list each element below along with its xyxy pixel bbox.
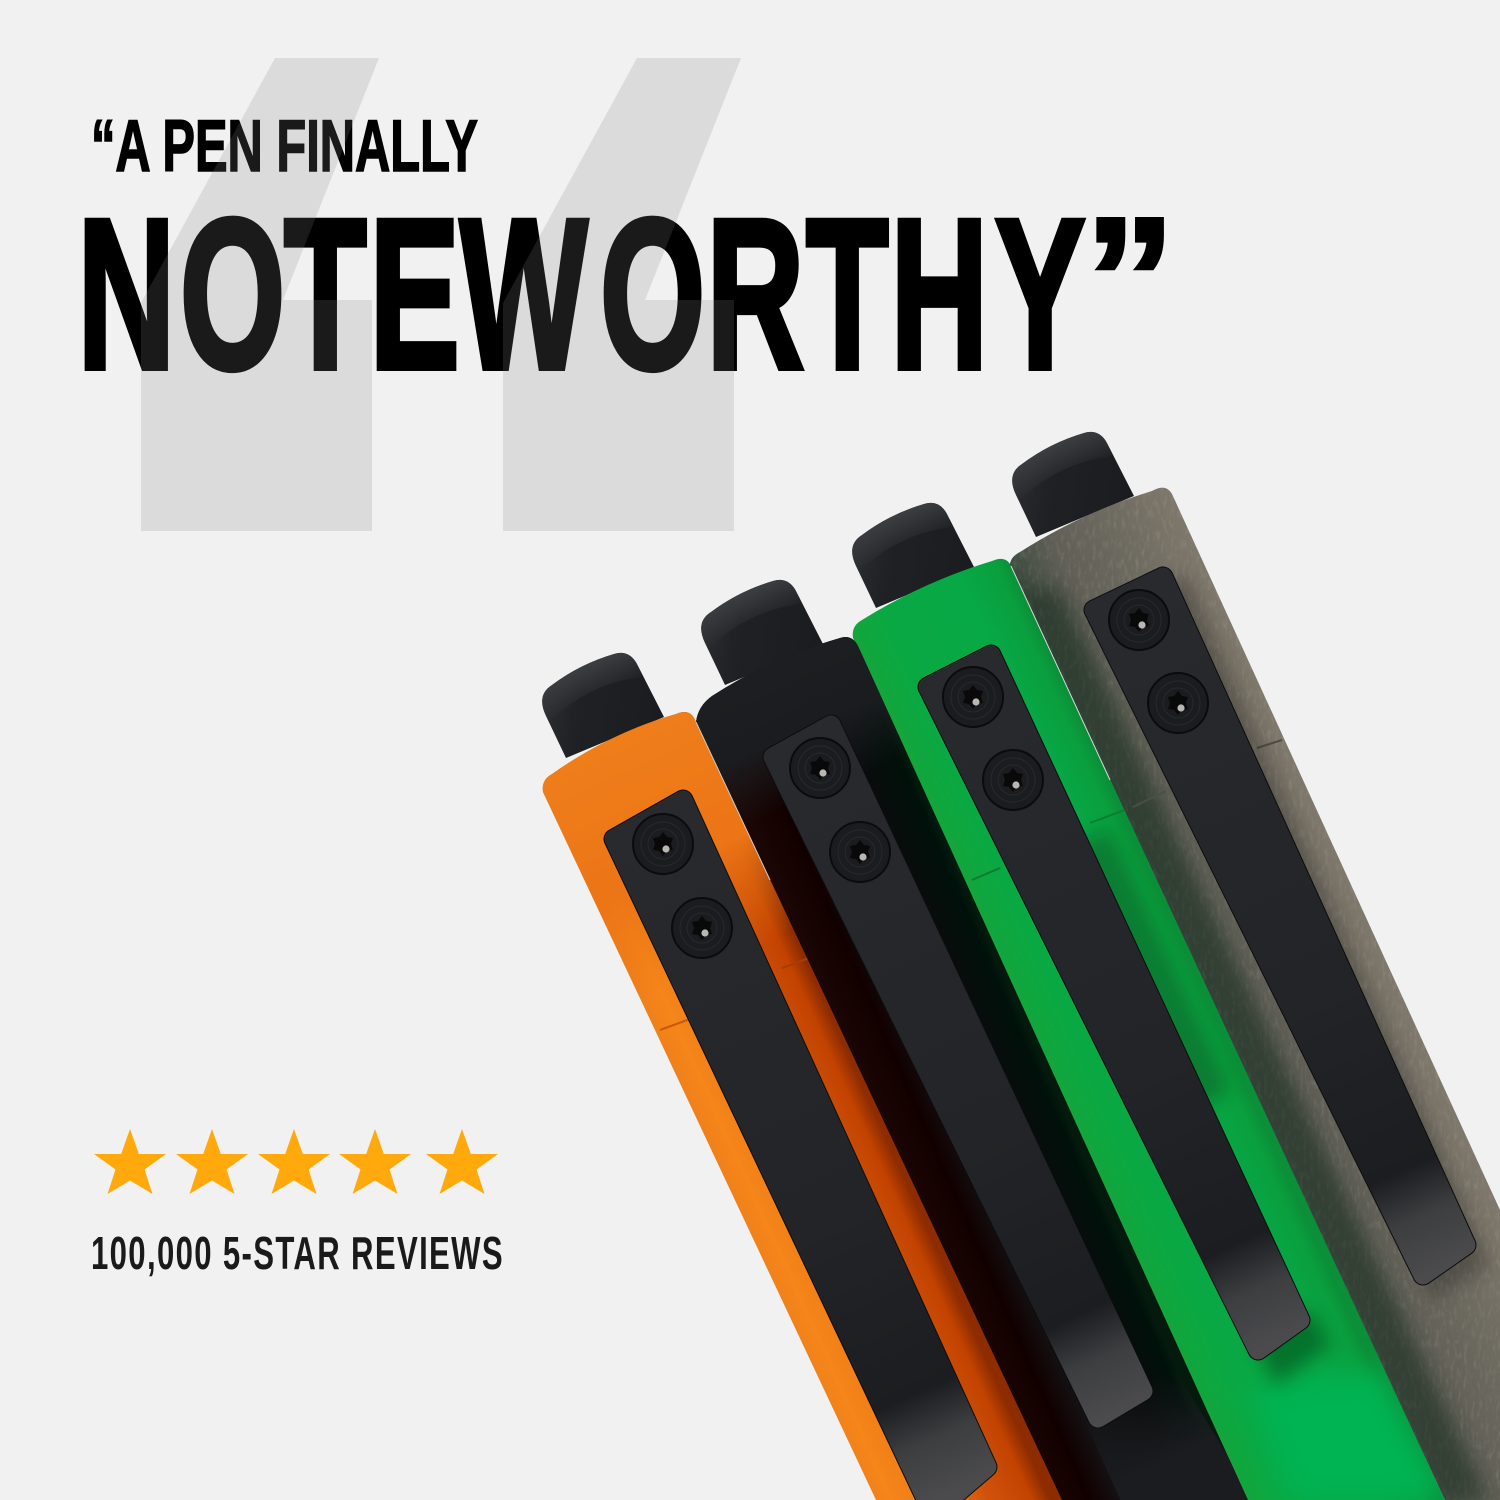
star 2 xyxy=(176,1129,248,1194)
heading: quote text xyxy=(77,106,1176,413)
clip: grey pen xyxy=(1094,577,1466,1275)
clip: orange pen xyxy=(614,800,987,1500)
cap: grey pen xyxy=(1012,432,1134,537)
pen: green xyxy=(840,503,1460,1500)
barrel: orange pen xyxy=(535,700,1075,1500)
pen: orange xyxy=(535,566,1110,1500)
star 5 xyxy=(426,1129,498,1194)
large translucent quotation mark xyxy=(141,58,741,531)
barrel: black pen xyxy=(690,630,1260,1500)
quote stroke left xyxy=(141,58,379,531)
star rating xyxy=(94,1129,498,1194)
barrel: green pen xyxy=(840,550,1460,1500)
star 1 xyxy=(94,1129,166,1194)
cap: orange pen xyxy=(542,653,664,758)
review count: 100,000 5-STAR REVIEWS xyxy=(91,1227,504,1279)
clip shadow: green pen xyxy=(1255,1310,1330,1385)
closing quotation mark: ” xyxy=(1084,180,1176,379)
screw lower: green pen xyxy=(983,750,1043,810)
cap: black pen xyxy=(701,580,823,685)
screw lower: grey pen xyxy=(1148,673,1208,733)
star 4 xyxy=(339,1129,411,1194)
heading line: noteworthy: NOTEWORTHY xyxy=(77,174,1085,413)
screw upper: orange pen xyxy=(633,814,693,874)
clip shadow: grey pen xyxy=(1174,574,1491,1299)
screw upper: grey pen xyxy=(1109,590,1169,650)
quote stroke right xyxy=(503,58,741,531)
star 3 xyxy=(258,1129,330,1194)
screw upper: green pen xyxy=(943,667,1003,727)
clip: black pen xyxy=(773,725,1143,1418)
screw lower: orange pen xyxy=(672,898,732,958)
pen: titanium grey xyxy=(1000,432,1500,1500)
clip: green pen xyxy=(928,655,1300,1350)
heading line: a pen finally: “A PEN FINALLY xyxy=(91,106,478,187)
barrel: grey pen xyxy=(1000,480,1500,1500)
cap: green pen xyxy=(852,503,974,608)
pen: black xyxy=(690,580,1260,1500)
screw upper: black pen xyxy=(790,738,850,798)
screw lower: black pen xyxy=(830,822,890,882)
